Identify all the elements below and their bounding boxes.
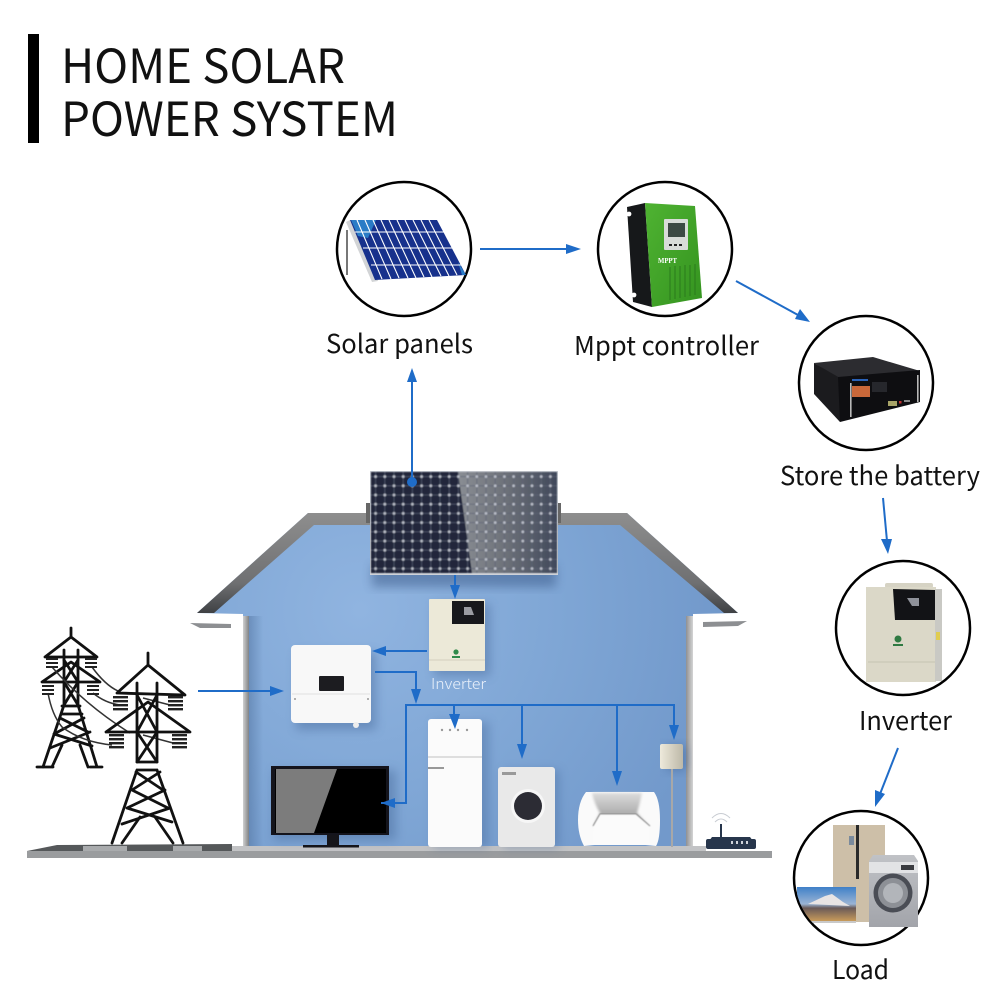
refrigerator — [428, 719, 489, 848]
router — [706, 814, 756, 849]
house solar panel — [366, 471, 561, 587]
arrow: inverter to white box — [372, 646, 427, 656]
circle: solar panels — [337, 182, 471, 316]
label: solar panels: Solar panels — [326, 324, 473, 361]
circle: mppt controller — [598, 182, 732, 316]
house — [190, 513, 747, 848]
arrow: white box to distribution line — [375, 672, 421, 704]
arrow: grid to white box — [198, 686, 284, 696]
arrows: distribution to appliances — [381, 705, 679, 808]
arrow: house panel to solar panels — [407, 368, 417, 487]
arrow: inverter to load — [875, 748, 898, 807]
circle: mppt controller: MPPT — [658, 257, 677, 265]
indoor inverter — [429, 599, 490, 694]
title — [28, 28, 398, 150]
indoor inverter: Inverter — [431, 673, 487, 694]
floor — [27, 844, 772, 858]
armchair — [578, 792, 660, 846]
title: HOME SOLAR — [61, 28, 345, 97]
icon: transmission towers — [37, 628, 190, 843]
television — [271, 766, 396, 848]
arrow: house panel to inverter — [450, 575, 460, 599]
floor lamp — [660, 744, 686, 847]
label: store the battery: Store the battery — [780, 456, 980, 493]
circle: load — [794, 811, 928, 945]
label: inverter: Inverter — [859, 701, 953, 738]
title: POWER SYSTEM — [61, 81, 398, 150]
label: load: Load — [832, 950, 889, 987]
arrow: controller to battery — [736, 281, 810, 322]
circle: battery — [799, 316, 933, 450]
circle: inverter — [836, 561, 970, 695]
arrow: solar panels to controller — [480, 244, 581, 254]
label: mppt controller: Mppt controller — [574, 326, 760, 363]
arrow: battery to inverter — [881, 498, 892, 554]
hybrid inverter white box — [291, 645, 376, 730]
washing machine — [498, 767, 559, 848]
